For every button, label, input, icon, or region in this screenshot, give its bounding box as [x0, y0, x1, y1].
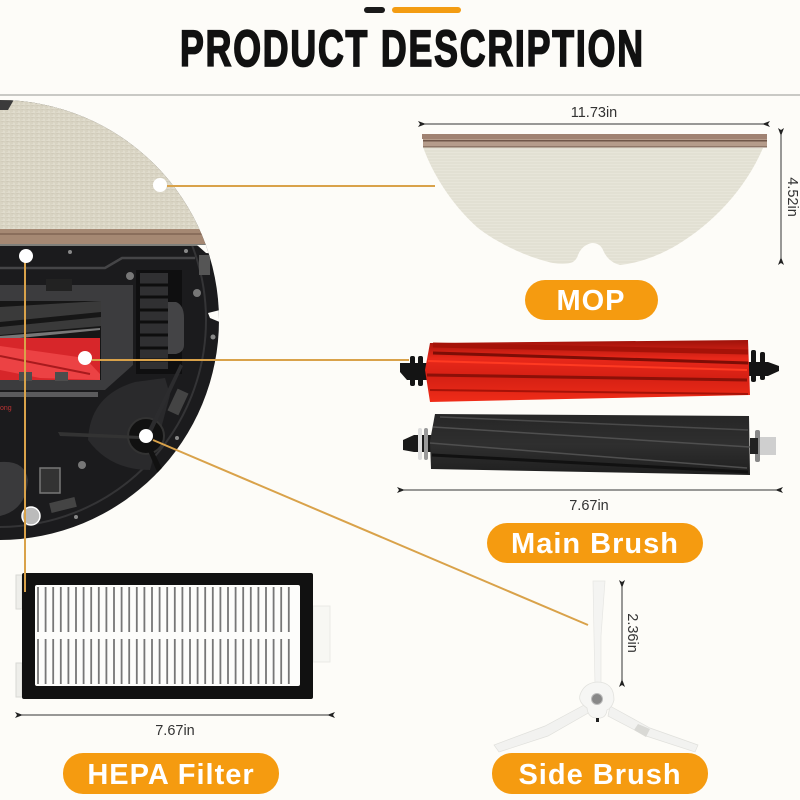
side brush dimension: 2.36in: [624, 613, 640, 653]
leader dots: [19, 178, 167, 443]
chassis details: ong: [0, 405, 12, 412]
mop height dimension: [781, 135, 800, 258]
title accent bars: [364, 7, 461, 13]
label: Side Brush: [492, 753, 708, 794]
title: PRODUCT DESCRIPTION: [180, 21, 645, 78]
side brush product: [494, 581, 698, 752]
chassis details: [0, 245, 222, 519]
red main brush: [400, 340, 779, 402]
leader lines: [25, 186, 588, 625]
brush compartment: [0, 279, 133, 397]
label: Main Brush: Main Brush: [511, 528, 679, 560]
robot vacuum underside: [0, 96, 235, 546]
robot side brush: [58, 364, 183, 472]
black main brush: [403, 414, 776, 475]
label: Main Brush: [487, 523, 703, 563]
HEPA dimension: 7.67in: [155, 723, 195, 739]
label: HEPA Filter: [63, 753, 279, 794]
top chassis ridge: [0, 258, 195, 268]
mop product: [420, 134, 767, 270]
front caster wheel: [22, 507, 40, 525]
outer ring: [0, 246, 207, 528]
mop height dimension: 4.52in: [784, 177, 800, 217]
HEPA filter: [16, 573, 330, 699]
mop width dimension: 11.73in: [571, 105, 617, 121]
robot mop: [0, 100, 206, 246]
label: HEPA Filter: HEPA Filter: [87, 759, 255, 791]
label: Side Brush: Side Brush: [518, 759, 682, 791]
main brush dimension: 7.67in: [569, 498, 609, 514]
side brush dimension: [622, 587, 640, 680]
label: MOP: [525, 280, 658, 320]
gear module: [136, 270, 184, 374]
label: MOP: MOP: [556, 285, 626, 317]
